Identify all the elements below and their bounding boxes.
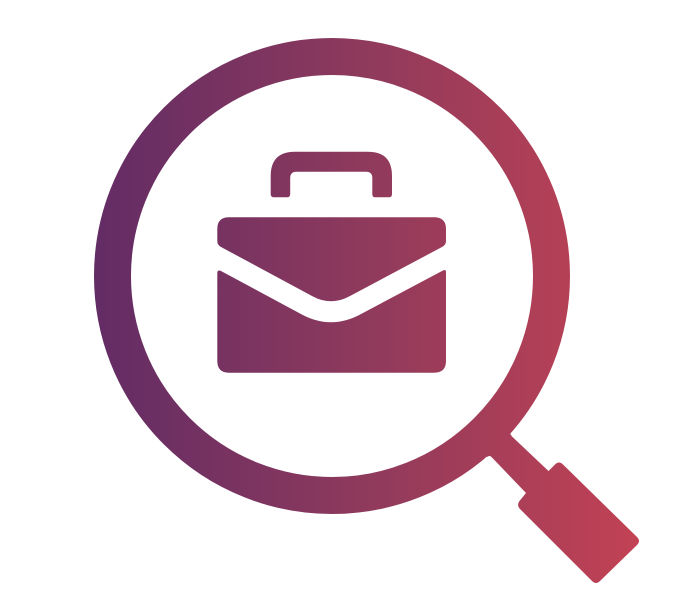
magnifying glass ring [112, 56, 552, 496]
briefcase handle [271, 152, 392, 197]
magnifying glass handle [478, 425, 639, 583]
briefcase lower body [217, 270, 446, 373]
briefcase upper flap [217, 217, 446, 301]
